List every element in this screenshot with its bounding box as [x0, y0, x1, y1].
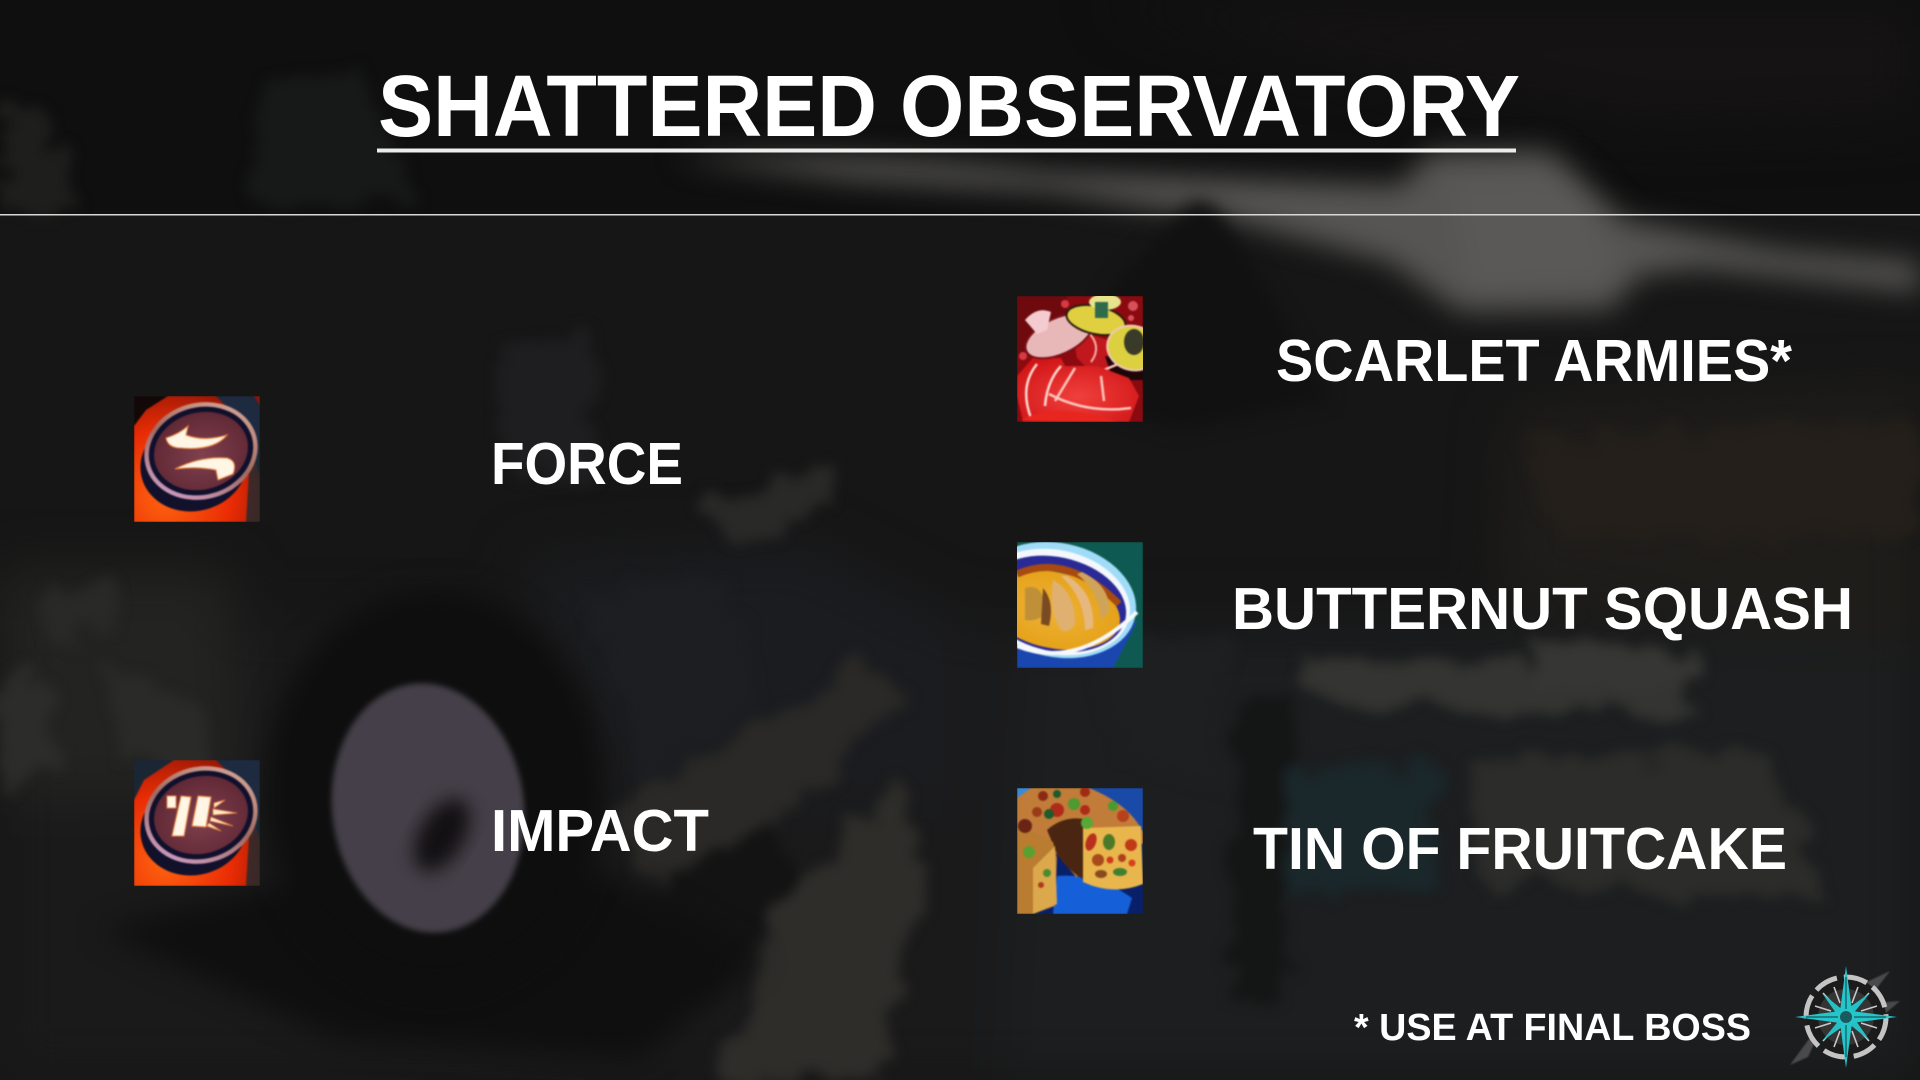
icon: force: [134, 396, 260, 522]
header divider: [0, 214, 1920, 216]
icon: compass logo: [1790, 966, 1900, 1068]
title: SHATTERED OBSERVATORY: [378, 58, 1520, 155]
label: scarlet armies: SCARLET ARMIES*: [1276, 328, 1792, 394]
icon: butternut squash soup: [1017, 542, 1143, 668]
label: force: FORCE: [491, 431, 683, 497]
dark roof silhouette: [1070, 200, 1330, 430]
label: tin of fruitcake: TIN OF FRUITCAKE: [1253, 816, 1787, 882]
icon: scarlet armies potions: [1017, 296, 1143, 422]
portal ring: [100, 590, 760, 1060]
footnote: * USE AT FINAL BOSS: [1354, 1007, 1751, 1049]
icon: tin of fruitcake: [1017, 787, 1143, 914]
label: butternut squash: BUTTERNUT SQUASH: [1232, 576, 1853, 642]
icon: impact: [134, 760, 260, 886]
light streak: [673, 150, 1920, 312]
label: impact: IMPACT: [491, 798, 709, 864]
